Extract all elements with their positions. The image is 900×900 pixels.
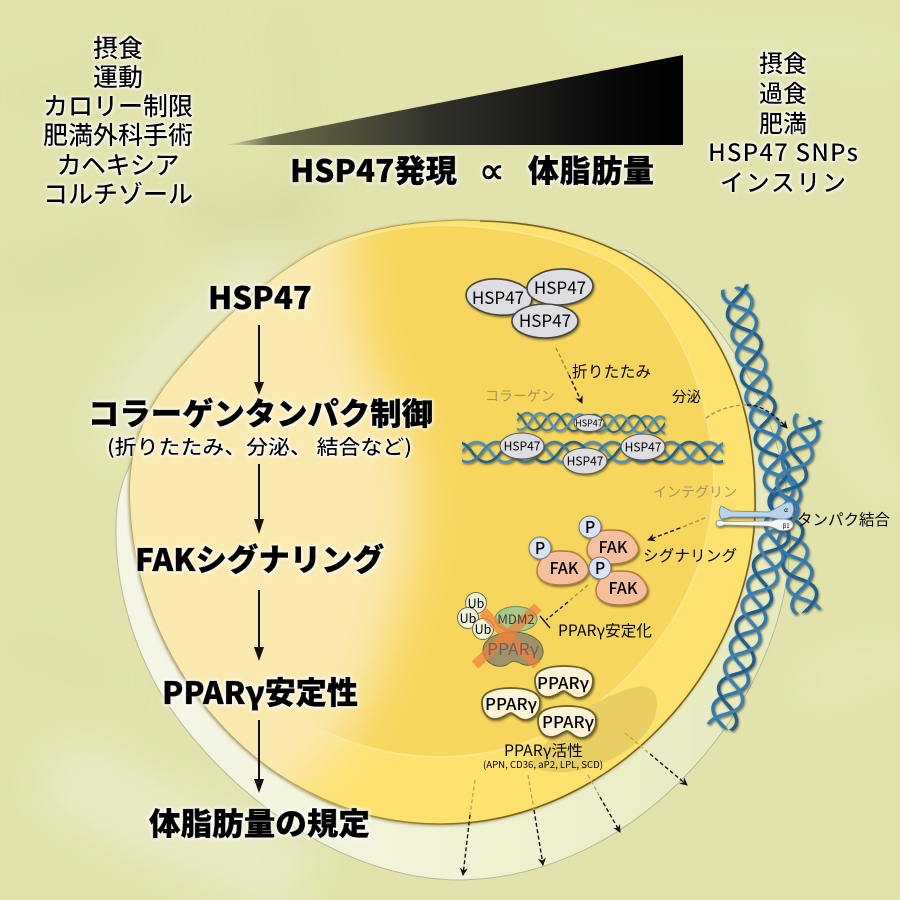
HSP47 trimer: HSP47 <box>519 307 571 332</box>
degraded PPAR complex: Ub <box>468 593 485 612</box>
left factor list: 肥満外科手術 <box>43 116 193 152</box>
small procollagen helix <box>516 412 668 436</box>
active PPAR trio <box>482 666 596 738</box>
pale lipid highlight <box>130 228 446 801</box>
left factor list: 運動 <box>93 58 143 94</box>
secretion arrow <box>706 405 787 428</box>
flow arrow 4 <box>254 720 264 793</box>
secretion arrows <box>463 733 687 875</box>
integrin: β1 <box>782 521 790 530</box>
flow arrow 3 <box>254 590 264 661</box>
degraded PPAR complex <box>458 592 543 666</box>
active PPAR trio: PPARγ <box>485 691 537 715</box>
left factor list <box>43 29 193 211</box>
title: 体脂肪量 <box>528 146 654 191</box>
degraded PPAR complex: Ub <box>460 608 477 627</box>
right factor list <box>708 44 858 198</box>
flow label: PPAR stability: PPARγ安定性 <box>162 668 358 713</box>
FAK complex: P <box>535 535 545 559</box>
FAK complex: FAK <box>599 534 628 558</box>
label: PPAR stabilisation: PPARγ安定化 <box>558 619 652 641</box>
yellow adipocyte <box>126 218 757 828</box>
HSP47 on large collagen: HSP47 <box>504 438 541 454</box>
title: HSP47発現 <box>290 146 457 191</box>
flow arrow 1 <box>254 325 264 395</box>
flow label: collagen control: コラーゲンタンパク制御 <box>88 389 433 434</box>
HSP47 trimer: HSP47 <box>534 274 586 299</box>
small HSP47 on collagen: HSP47 <box>575 416 603 430</box>
extracellular collagen fibres <box>706 284 824 734</box>
label: folding: 折りたたみ <box>572 360 651 382</box>
flow arrow 2 <box>254 464 264 534</box>
right factor list: 肥満 <box>759 104 807 139</box>
HSP47 on large collagen <box>500 433 665 474</box>
gradient wedge <box>225 55 683 145</box>
degraded PPAR complex: MDM2 <box>497 609 535 628</box>
label: signalling: シグナリング <box>643 544 737 566</box>
cytoplasm <box>218 224 715 758</box>
integrin: α <box>784 505 788 514</box>
large collagen helix <box>424 442 781 462</box>
degraded PPAR complex: Ub <box>475 619 492 638</box>
label: target genes: (APN, CD36, aP2, LPL, SCD) <box>483 757 603 771</box>
FAK complex: P <box>595 555 605 579</box>
label: collagen: コラーゲン <box>485 386 555 406</box>
HSP47 on large collagen: HSP47 <box>567 452 604 470</box>
flow label: FAK: FAKシグナリング <box>135 535 384 580</box>
active PPAR trio: PPARγ <box>537 670 589 694</box>
label: PPAR activity: PPARγ活性 <box>504 739 583 761</box>
HSP47 on large collagen: HSP47 <box>625 438 662 456</box>
left factor list: カロリー制限 <box>43 87 193 123</box>
integrin <box>716 502 794 531</box>
folding arrow <box>556 348 582 403</box>
outer pale cell ring <box>116 250 790 880</box>
FAK complex: P <box>585 514 595 538</box>
flow label: HSP47: HSP47 <box>208 273 312 318</box>
inhibition arrow <box>540 585 588 628</box>
degraded PPAR complex: PPARγ <box>487 636 539 660</box>
flow sub label: (折りたたみ、分泌、 結合など) <box>107 431 412 460</box>
title <box>290 146 654 192</box>
label: integrin: インテグリン <box>653 482 737 502</box>
right factor list: 過食 <box>759 74 807 109</box>
HSP47 trimer <box>465 267 594 338</box>
right factor list: HSP47 SNPs <box>708 133 858 168</box>
flow label: body fat: 体脂肪量の規定 <box>149 799 370 844</box>
FAK complex: FAK <box>609 575 638 599</box>
label: protein binding: タンパク結合 <box>797 508 890 530</box>
FAK complex <box>529 514 647 605</box>
left factor list: コルチゾール <box>43 175 193 211</box>
label: secretion: 分泌 <box>672 386 701 407</box>
nucleus <box>532 686 657 772</box>
active PPAR trio: PPARγ <box>542 709 594 733</box>
left factor list: カヘキシア <box>56 146 180 182</box>
dark membrane edge <box>300 221 755 824</box>
left factor list: 摂食 <box>93 29 143 65</box>
right factor list: インスリン <box>720 163 846 198</box>
title: ∝ <box>479 151 505 192</box>
right factor list: 摂食 <box>759 44 807 79</box>
HSP47 trimer: HSP47 <box>472 284 524 309</box>
FAK complex: FAK <box>550 555 579 579</box>
signalling arrow <box>648 518 705 540</box>
